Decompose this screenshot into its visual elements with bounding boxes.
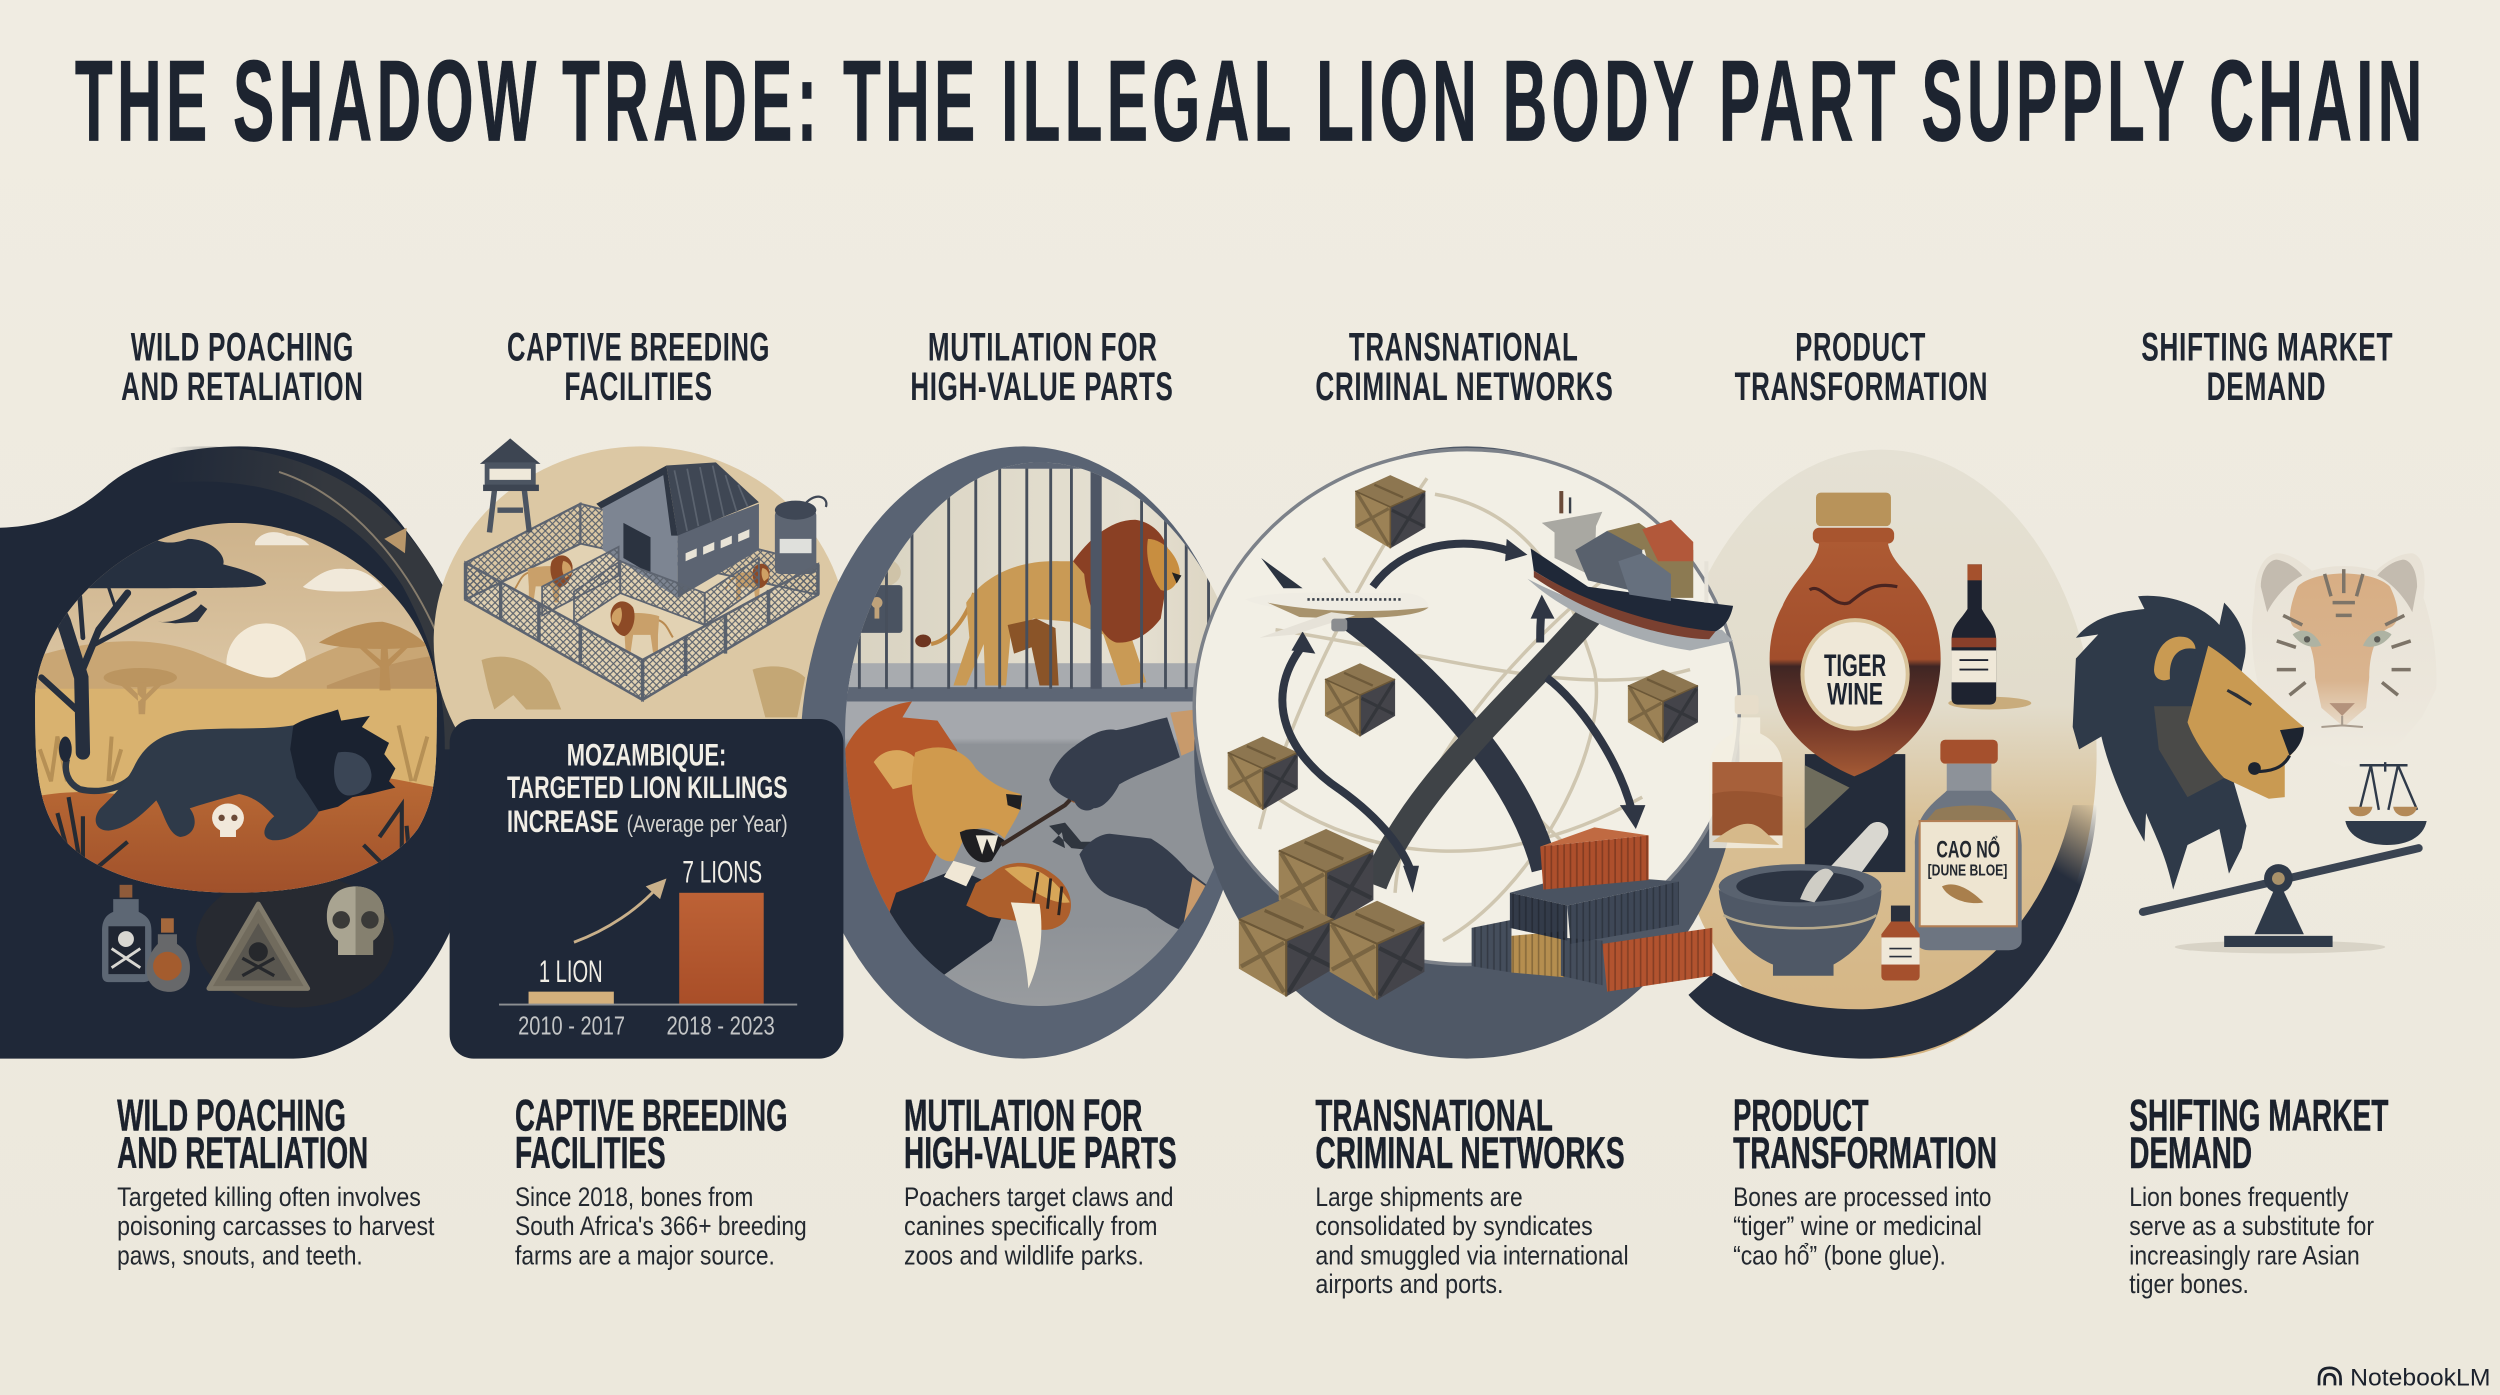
text block: transnational: consolidated by syndicates — [1315, 1210, 1593, 1241]
panel: mutilation illustration — [800, 446, 1260, 1059]
barn — [596, 462, 759, 598]
upper heading: transnational — [1315, 325, 1614, 409]
text block: transnational: CRIMINAL NETWORKS — [1315, 1129, 1625, 1178]
text block: shifting market: serve as a substitute for — [2129, 1210, 2374, 1241]
caged lion — [915, 520, 1181, 686]
acacia tree — [41, 587, 195, 753]
tree crown — [88, 538, 266, 588]
dark backdrop with arc — [0, 446, 482, 1059]
panel: captive breeding illustration — [434, 438, 848, 835]
bird — [158, 604, 207, 623]
axis — [499, 1004, 797, 1006]
cao ho label text — [1928, 836, 2007, 879]
distant acacia left — [104, 668, 177, 714]
upper heading: captive breeding — [507, 325, 770, 409]
x labels: 2010 - 2017 — [518, 1013, 625, 1041]
pliers — [1049, 822, 1091, 850]
text block: wild poaching: AND RETALIATION — [117, 1129, 368, 1178]
text block: wild poaching — [117, 1091, 435, 1270]
text block: transnational — [1315, 1091, 1629, 1299]
outer grey ring — [800, 446, 1247, 1059]
text block: captive breeding: CAPTIVE BREEDING — [515, 1091, 788, 1140]
lion in centre pen — [611, 601, 673, 652]
clouds — [255, 532, 309, 545]
cao ho bottle — [1915, 740, 2022, 950]
upper heading: transnational: TRANSNATIONAL — [1349, 325, 1578, 369]
panel: shifting market demand illustration — [2073, 553, 2437, 953]
textured arc band — [167, 464, 462, 749]
bottle label text: TIGER — [1824, 647, 1886, 683]
cage bars — [859, 462, 1231, 689]
x labels — [518, 1013, 775, 1041]
text block: shifting market: increasingly rare Asian — [2129, 1239, 2360, 1270]
text block: mutilation: canines specifically from — [904, 1210, 1158, 1241]
text block: captive breeding: farms are a major source. — [515, 1239, 775, 1270]
text block: transnational: TRANSNATIONAL — [1315, 1091, 1553, 1140]
text block: transnational: and smuggled via international — [1315, 1239, 1629, 1270]
upper heading: wild poaching — [121, 325, 364, 409]
x labels: 2018 - 2023 — [666, 1013, 775, 1041]
small wine bottle — [1948, 564, 2031, 709]
cao ho label text: [DUNE BLOE] — [1928, 862, 2007, 879]
text block: captive breeding: FACILITIES — [515, 1129, 666, 1178]
upper heading: captive breeding: FACILITIES — [564, 365, 713, 409]
bottle label text — [1824, 647, 1886, 712]
upper heading: captive breeding: CAPTIVE BREEDING — [507, 325, 770, 369]
crate — [1628, 670, 1698, 743]
tan circle — [434, 446, 848, 835]
soil — [42, 778, 433, 893]
text block: wild poaching: Targeted killing often involves — [117, 1181, 421, 1212]
fence posts — [466, 563, 818, 700]
upper heading: mutilation: HIGH-VALUE PARTS — [910, 365, 1173, 409]
text block: shifting market: Lion bones frequently — [2129, 1181, 2349, 1212]
dark box behind bottle — [1805, 754, 1905, 872]
airplane — [1245, 558, 1429, 638]
mortar and pestle — [1719, 822, 1888, 976]
text block: captive breeding: South Africa's 366+ breeding — [515, 1210, 807, 1241]
text block: product transformation: “tiger” wine or medicinal — [1733, 1210, 1982, 1241]
bar: 2018-2023 — [679, 853, 764, 1004]
bar: 2010-2017 — [529, 953, 614, 1004]
bottle label text: WINE — [1827, 676, 1883, 712]
container stack — [1472, 827, 1712, 992]
savanna scene — [32, 518, 446, 901]
upper heading: product transformation — [1735, 325, 1988, 409]
panel: wild poaching illustration — [0, 446, 482, 1059]
small brown bottle — [1881, 906, 1920, 980]
logo: NotebookLM: NotebookLM — [2350, 1364, 2490, 1391]
tiny skull — [212, 804, 244, 837]
dark crescent — [1688, 805, 2097, 1059]
text block: transnational: airports and ports. — [1315, 1268, 1504, 1299]
upper glove — [1049, 709, 1196, 811]
icon: skull — [327, 886, 384, 955]
back fence right — [580, 504, 818, 595]
poached lion — [59, 709, 395, 840]
cage and lower scene — [845, 462, 1218, 1006]
chart title: MOZAMBIQUE: — [567, 736, 726, 772]
upper heading: product transformation: PRODUCT — [1795, 325, 1926, 369]
text block: product transformation: “cao hổ” (bone glue). — [1733, 1239, 1946, 1270]
upper heading: mutilation: MUTILATION FOR — [928, 325, 1158, 369]
chart title: (Average per Year) — [627, 811, 788, 838]
bar: 2010-2017: 1 LION — [539, 953, 603, 989]
text block: shifting market: DEMAND — [2129, 1129, 2252, 1178]
oval base — [1666, 450, 2097, 1059]
chart background — [450, 719, 843, 1059]
text block: product transformation: PRODUCT — [1733, 1091, 1869, 1140]
panel: product transformation items — [1709, 493, 2031, 980]
text block: captive breeding — [515, 1091, 807, 1270]
upper heading: shifting market: DEMAND — [2207, 365, 2326, 409]
text block: mutilation: MUTILATION FOR — [904, 1091, 1142, 1140]
scales of justice — [2345, 762, 2427, 845]
crate — [1325, 663, 1395, 737]
arc guide line — [279, 472, 459, 701]
front fence — [466, 563, 643, 700]
upper heading: wild poaching: AND RETALIATION — [121, 365, 364, 409]
lion head — [2073, 596, 2304, 890]
ground shadows of lions — [482, 657, 561, 709]
upper heading: wild poaching: WILD POACHING — [131, 325, 354, 369]
crate stack — [1239, 829, 1424, 1000]
text block: captive breeding: Since 2018, bones from — [515, 1181, 753, 1212]
lock plate — [861, 561, 902, 633]
text block: mutilation: zoos and wildlife parks. — [904, 1239, 1144, 1270]
distant acacia right — [319, 622, 427, 690]
back fence left — [466, 504, 580, 599]
globe lines — [1260, 478, 1690, 941]
tool — [1000, 798, 1072, 847]
muted ground behind hazards — [196, 874, 394, 1008]
grass tufts behind — [40, 725, 427, 781]
crossing route straps — [1346, 614, 1591, 885]
lower glove — [1080, 834, 1206, 929]
arrow heads — [1291, 539, 1645, 893]
upper heading: transnational: CRIMINAL NETWORKS — [1315, 365, 1614, 409]
text block: mutilation: Poachers target claws and — [904, 1181, 1173, 1212]
upper heading: product transformation: TRANSFORMATION — [1735, 365, 1988, 409]
arrows — [1282, 544, 1633, 877]
watch tower — [480, 438, 540, 532]
tiger wine bottle — [1770, 493, 1941, 776]
grey crescent base — [1194, 446, 1739, 1059]
foreground grass — [55, 796, 410, 867]
pen floor — [466, 544, 818, 700]
text block: product transformation: TRANSFORMATION — [1733, 1129, 1997, 1178]
glass jar — [1709, 695, 1783, 848]
icon: poison bottles — [102, 885, 190, 992]
text block: mutilation: HIGH-VALUE PARTS — [904, 1129, 1177, 1178]
upper heading: shifting market — [2141, 325, 2393, 409]
sun — [226, 623, 306, 678]
panel: product transformation backdrop — [1666, 450, 2097, 1059]
chart title — [507, 736, 788, 839]
ground — [32, 689, 446, 804]
bar: 2018-2023: 7 LIONS — [682, 853, 762, 889]
cream globe — [1194, 450, 1739, 965]
text block: shifting market — [2129, 1091, 2388, 1299]
chart title: INCREASE — [507, 803, 619, 839]
mutilated lion head — [845, 701, 1071, 988]
text block: wild poaching: paws, snouts, and teeth. — [117, 1239, 363, 1270]
text block: wild poaching: WILD POACHING — [117, 1091, 346, 1140]
text block: mutilation — [904, 1091, 1177, 1270]
lion in left pen — [515, 555, 573, 602]
text block: product transformation — [1733, 1091, 1997, 1270]
panel: transnational criminal networks illustration — [1194, 446, 1739, 1059]
upper heading: mutilation — [910, 325, 1173, 409]
cao ho label text: CAO NỔ — [1936, 836, 2000, 864]
seesaw — [2143, 848, 2419, 953]
text block: product transformation: Bones are processed into — [1733, 1181, 1991, 1212]
icon: warning triangle — [209, 904, 308, 988]
cargo ship — [1527, 491, 1733, 650]
inner fence walls — [542, 547, 619, 615]
hills — [35, 638, 446, 717]
lion in right pen — [726, 564, 770, 600]
crate — [1228, 737, 1298, 810]
text block: transnational: Large shipments are — [1315, 1181, 1523, 1212]
barrel — [775, 497, 826, 574]
chart title: TARGETED LION KILLINGS — [507, 769, 788, 805]
crate — [1355, 475, 1425, 548]
text block: wild poaching: poisoning carcasses to harvest — [117, 1210, 435, 1241]
arc arrow head — [384, 528, 407, 553]
chart panel: Mozambique killings — [450, 719, 843, 1059]
text block: shifting market: tiger bones. — [2129, 1268, 2249, 1299]
tiger head — [2252, 553, 2437, 767]
trend arrow — [574, 878, 666, 942]
